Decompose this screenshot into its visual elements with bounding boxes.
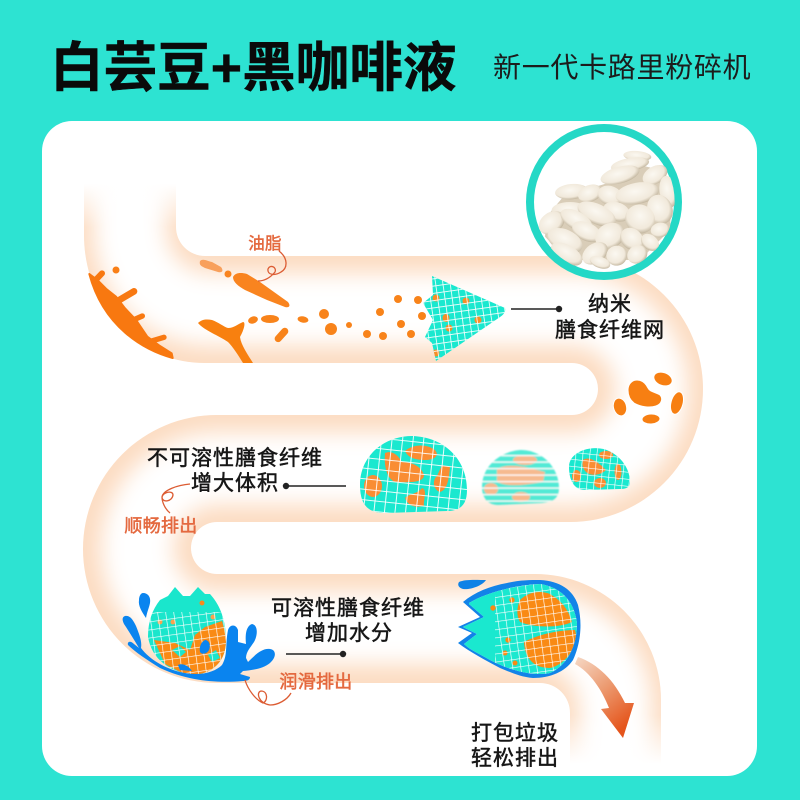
label: soluble fibre [271, 597, 425, 645]
oil stream: lower splash shape [198, 319, 253, 363]
label: soluble fibre: 可溶性膳食纤维 [271, 597, 425, 620]
oil droplet above deposit [112, 266, 120, 274]
oil droplets [247, 295, 426, 344]
label: lubricated discharge [245, 672, 353, 705]
label: smooth discharge left: 顺畅排出 [124, 516, 198, 536]
icon: bean photo circle [530, 128, 680, 276]
label: nano fibre net: 膳食纤维网 [555, 319, 665, 342]
label: lubricated discharge: 润滑排出 [279, 672, 353, 692]
label: soluble fibre: 增加水分 [305, 622, 393, 645]
panel: white card [42, 121, 757, 776]
label: oil: 油脂 [248, 234, 282, 253]
label: oil [248, 234, 286, 281]
label: insoluble fibre [147, 447, 323, 495]
net ball small [569, 448, 630, 490]
oil stream: upper clot [200, 260, 289, 307]
label: insoluble fibre: 增大体积 [191, 472, 279, 495]
subtitle: 新一代卡路里粉碎机 [493, 52, 751, 83]
net ball blurred [481, 449, 560, 506]
net ball with water splash [123, 585, 275, 682]
leader line: nano net [511, 306, 562, 312]
net ball with blue outline [458, 580, 580, 678]
label: smooth discharge left [124, 484, 198, 536]
arrow: downward discharge [575, 657, 634, 738]
intestine pipe [83, 191, 703, 756]
label: nano fibre net: 纳米 [588, 293, 632, 316]
label: insoluble fibre: 不可溶性膳食纤维 [147, 447, 323, 470]
leader line: soluble fibre [286, 651, 346, 657]
label: pack and discharge: 打包垃圾 [471, 722, 559, 745]
icon: orange beans [611, 370, 686, 424]
net ball large [360, 436, 467, 513]
label: pack and discharge [471, 722, 559, 770]
label: nano fibre net [555, 293, 665, 342]
nano fibre net [423, 276, 506, 361]
label: pack and discharge: 轻松排出 [471, 747, 559, 770]
oil deposit on pipe wall [89, 273, 173, 358]
title: 白芸豆+黑咖啡液 [50, 38, 456, 98]
leader line: insoluble fibre [283, 483, 346, 489]
